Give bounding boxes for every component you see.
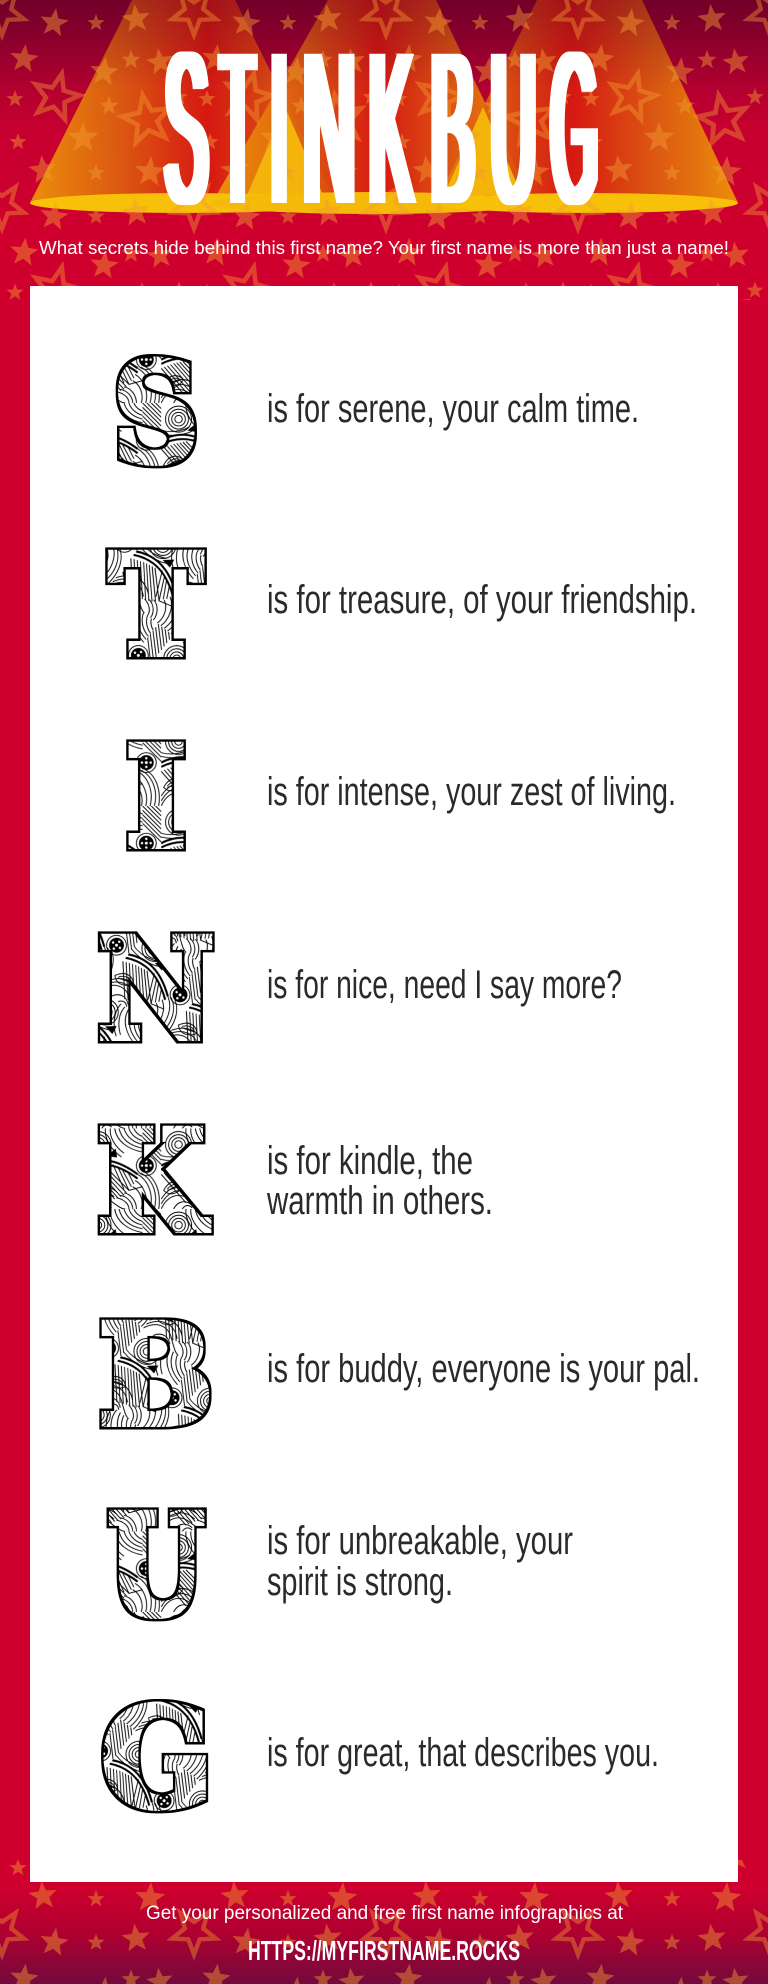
row S — [114, 334, 639, 492]
row U — [108, 1486, 573, 1646]
icon: letter N: N — [98, 910, 214, 1070]
overlap glow: left — [247, 107, 323, 195]
row T — [110, 526, 697, 686]
title: B — [431, 7, 474, 249]
row I — [126, 718, 676, 878]
star pattern top — [0, 0, 768, 300]
subtitle: What secrets hide behind this first name? Your first name is more than just a name! — [39, 237, 729, 258]
icon: letter K: K — [98, 1102, 208, 1262]
footer url: HTTPS://MYFIRSTNAME.ROCKS — [248, 1935, 520, 1966]
icon: letter U: U — [108, 1486, 204, 1646]
text: U lines — [267, 1519, 573, 1604]
title: N — [303, 9, 355, 250]
title: T — [221, 7, 254, 250]
text: S line: is for serene, your calm time. — [267, 387, 639, 431]
icon: letter G: G — [102, 1679, 212, 1837]
star pattern bottom — [0, 1860, 768, 1984]
top shade — [0, 0, 768, 90]
spotlight: centre cone — [212, 0, 533, 203]
icon: letter I: I — [126, 718, 186, 878]
light pool: centre — [210, 192, 534, 214]
title: G — [551, 7, 597, 249]
row B — [100, 1296, 700, 1456]
row N — [98, 910, 622, 1070]
text: K lines: is for kindle, the — [267, 1139, 473, 1183]
text: K lines: warmth in others. — [266, 1179, 493, 1223]
row K — [98, 1102, 493, 1262]
overlap glow: right — [444, 107, 522, 195]
title: U — [491, 7, 536, 249]
panel: letters — [30, 286, 738, 1882]
spotlight: right cone — [435, 0, 738, 203]
light pool: right — [436, 193, 738, 213]
title: I — [271, 6, 287, 249]
text: K lines — [266, 1139, 493, 1223]
spotlight: left cone — [30, 0, 336, 203]
spotlights — [0, 0, 768, 214]
title: S — [165, 6, 208, 249]
text: N line: is for nice, need I say more? — [267, 963, 622, 1007]
footer text: Get your personalized and free first name infographics at — [146, 1903, 624, 1924]
title: K — [369, 7, 412, 249]
light pool: left — [30, 193, 336, 213]
row G — [102, 1679, 659, 1837]
icon: letter S: S — [114, 334, 198, 492]
text: U lines: is for unbreakable, your — [267, 1519, 573, 1563]
panel background — [30, 286, 738, 1882]
title — [165, 6, 597, 250]
icon: letter T: T — [110, 526, 202, 686]
text: U lines: spirit is strong. — [267, 1560, 453, 1604]
icon: letter B: B — [100, 1296, 212, 1456]
